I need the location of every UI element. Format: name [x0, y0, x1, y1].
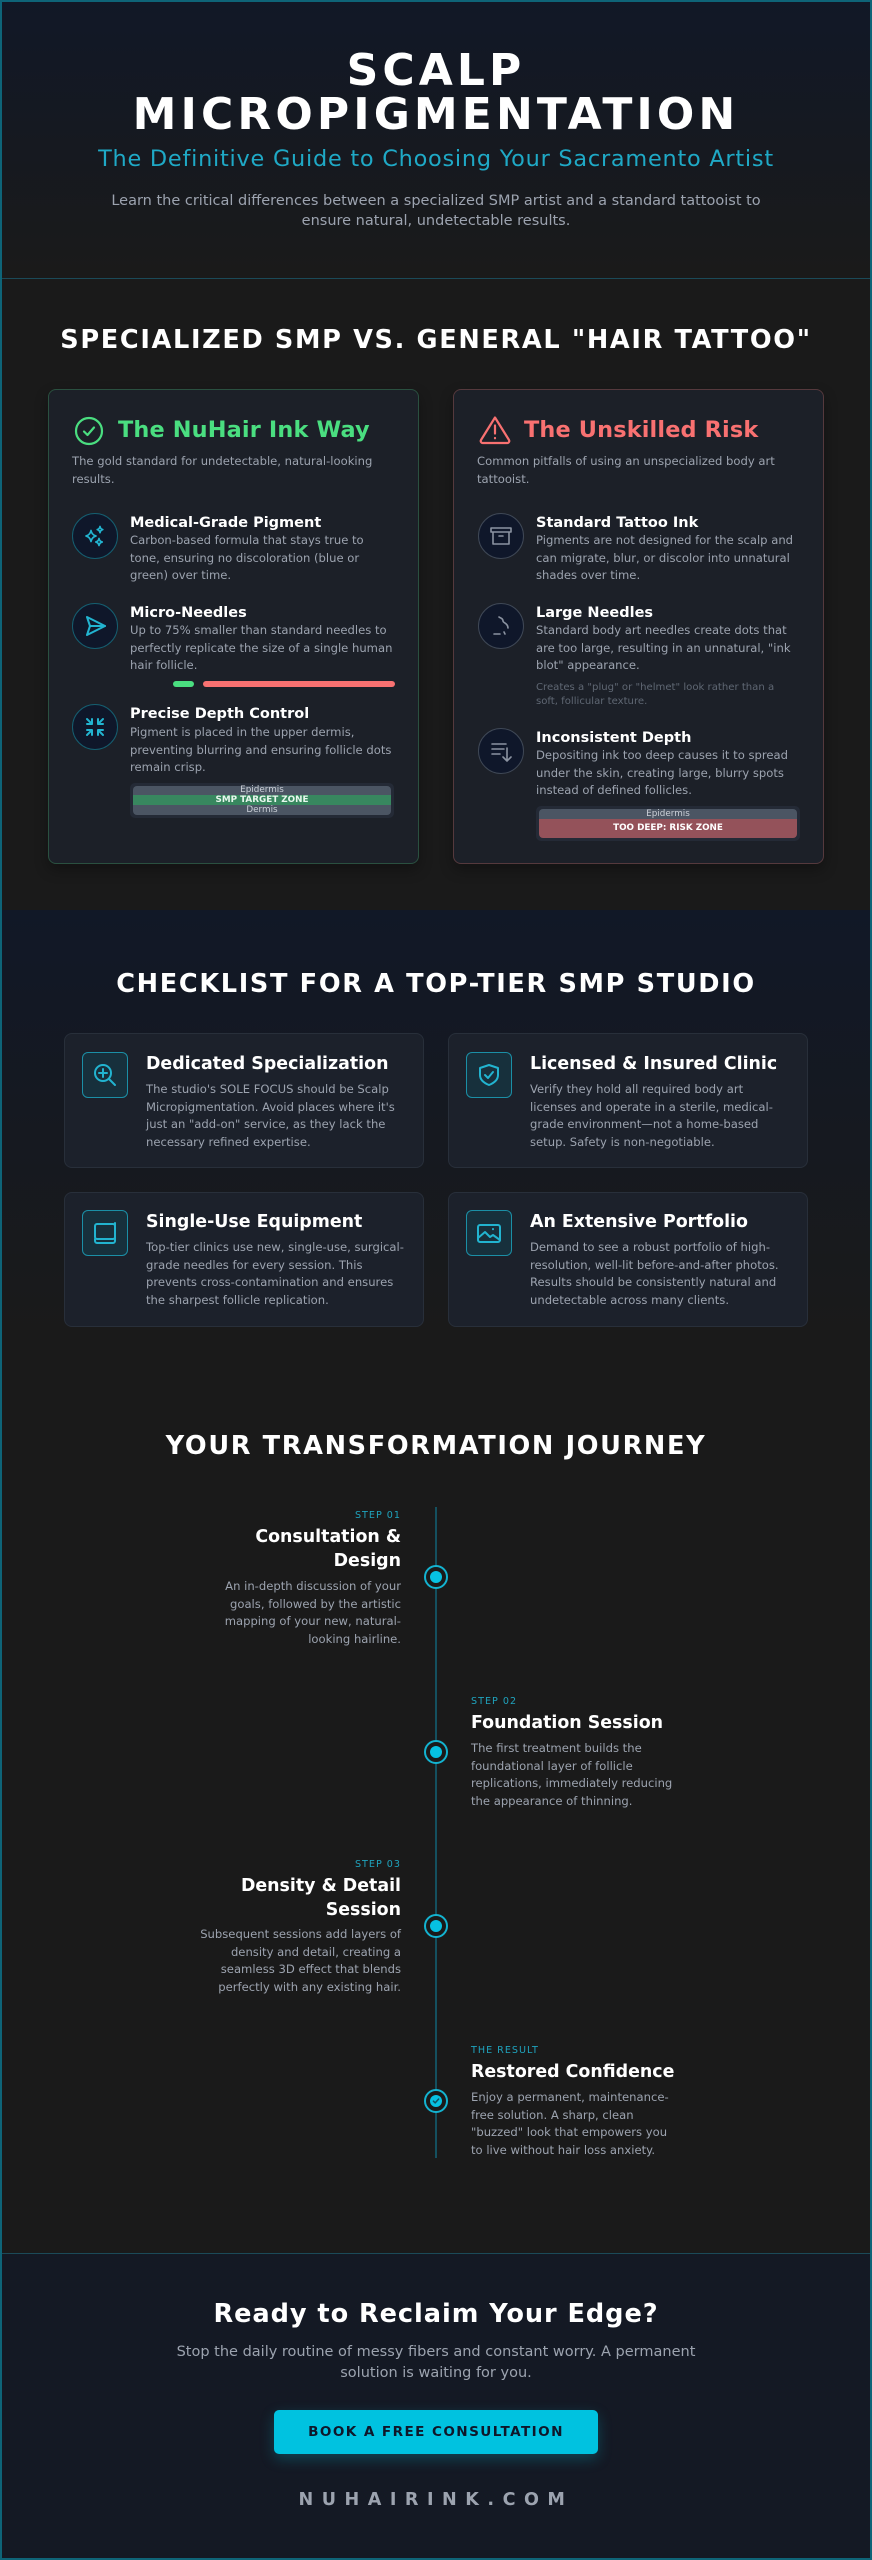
step 02 description: The first treatment builds the: [471, 1741, 642, 1755]
text: tattoo ink description: Pigments are not designed for the scalp and: [536, 533, 793, 547]
note: plug or helmet look: Creates a "plug" or "helmet" look rather than a: [536, 682, 774, 692]
text: medical-grade description: green) over time.: [130, 568, 231, 582]
text: tattoo ink description: [536, 533, 793, 582]
item: standard tattoo ink: Standard Tattoo Ink: [536, 515, 698, 531]
step 03 title: Density & Detail: [241, 1876, 401, 1896]
skin depth diagram: target zone: SMP TARGET ZONE: [215, 795, 309, 805]
item: inconsistent depth: Inconsistent Depth: [536, 730, 691, 746]
step 02 description: foundational layer of follicle: [471, 1758, 633, 1772]
step 02 description: replications, immediately reducing: [471, 1776, 672, 1790]
text: dedicated specialization description: The studio's SOLE FOCUS should be Scalp: [146, 1082, 389, 1096]
step 01 title: [255, 1527, 401, 1571]
text: depth control description: preventing blurring and ensuring follicle dots: [130, 742, 391, 756]
panel: the unskilled risk: [453, 389, 824, 864]
text: micro-needles description: Up to 75% smaller than standard needles to: [130, 623, 387, 637]
text: dedicated specialization description: [146, 1082, 395, 1148]
header band: [0, 0, 872, 279]
text: depth control description: [130, 725, 391, 774]
note: plug or helmet look: [536, 682, 774, 707]
intro text: ensure natural, undetectable results.: [302, 213, 570, 229]
icon: paper plane: [72, 603, 118, 649]
text: single-use description: Top-tier clinics use new, single-use, surgical-: [146, 1240, 404, 1254]
text: micro-needles description: perfectly replicate the size of a single human: [130, 640, 392, 654]
skin depth diagram: risk zone: [536, 806, 800, 841]
text: dedicated specialization description: just an "add-on" service, as they lack the: [146, 1117, 385, 1131]
step 02 description: [470, 1741, 672, 1808]
text: licensed and insured description: licenses and operate in a sterile, medical-: [530, 1100, 773, 1114]
step 02 description: the appearance of thinning.: [471, 1794, 632, 1808]
title: single-use equipment: Single-Use Equipment: [146, 1212, 362, 1232]
icon: warning triangle: [480, 416, 510, 444]
step 01 description: goals, followed by the artistic: [230, 1596, 401, 1610]
step 01 description: [225, 1579, 401, 1646]
CTA heading: Ready to Reclaim Your Edge?: [213, 2299, 659, 2329]
text: licensed and insured description: setup. Safety is non-negotiable.: [530, 1134, 715, 1148]
text: tattoo ink description: can migrate, blur, or discolor into unnatural: [536, 550, 790, 564]
panel: single-use equipment: [64, 1192, 424, 1327]
main title: [133, 45, 739, 140]
comparison heading: SPECIALIZED SMP VS. GENERAL "HAIR TATTOO": [60, 325, 812, 355]
result description: free solution. A sharp, clean: [471, 2108, 634, 2122]
icon: broken needle: [478, 603, 524, 649]
text: common pitfalls: Common pitfalls of using an unspecialized body art: [477, 454, 775, 468]
text: common pitfalls: [477, 454, 775, 486]
step 03 description: [200, 1927, 402, 1994]
CTA button: BOOK A FREE CONSULTATION: [308, 2424, 564, 2440]
title: dedicated specialization: Dedicated Specialization: [146, 1054, 388, 1074]
skin depth diagram: risk zone: Epidermis: [646, 809, 690, 819]
subtitle: The Definitive Guide to Choosing Your Sacramento Artist: [98, 146, 774, 172]
text: micro-needles description: [130, 623, 392, 672]
CTA text: solution is waiting for you.: [340, 2364, 532, 2380]
text: portfolio description: resolution, well-lit before-and-after photos.: [530, 1258, 779, 1272]
checklist band: [0, 910, 872, 1340]
intro text: [111, 192, 761, 229]
text: portfolio description: Demand to see a robust portfolio of high-: [530, 1240, 770, 1254]
intro text: Learn the critical differences between a specialized SMP artist and a standard tattooist to: [111, 192, 761, 208]
timeline marker 1: [424, 1565, 448, 1589]
text: dedicated specialization description: Micropigmentation. Avoid places where it's: [146, 1100, 395, 1114]
icon: image: [466, 1210, 512, 1256]
heading: NuHair way: The NuHair Ink Way: [118, 417, 370, 443]
text: medical-grade description: tone, ensuring no discoloration (blue or: [130, 550, 359, 564]
CTA text: [177, 2344, 696, 2380]
timeline marker 4: check: [424, 2089, 448, 2113]
text: single-use description: the sharpest follicle replication.: [146, 1292, 329, 1306]
CTA text: Stop the daily routine of messy fibers and constant worry. A permanent: [177, 2344, 695, 2360]
main title: SCALP: [347, 45, 525, 96]
text: licensed and insured description: [530, 1082, 773, 1148]
timeline marker 3: [424, 1914, 448, 1938]
skin depth diagram: target zone: Dermis: [246, 805, 278, 815]
item: large needles: Large Needles: [536, 605, 653, 621]
text: large needles description: are too large, resulting in an unnatural, "ink: [536, 640, 791, 654]
text: single-use description: prevents cross-contamination and ensures: [146, 1275, 393, 1289]
icon: shield check: [466, 1052, 512, 1098]
text: portfolio description: [530, 1240, 779, 1306]
journey heading: YOUR TRANSFORMATION JOURNEY: [166, 1431, 706, 1461]
result description: [471, 2090, 669, 2156]
icon: layered tray: [82, 1210, 128, 1256]
needle size comparison bars: [173, 681, 395, 687]
text: inconsistent depth description: Depositing ink too deep causes it to spread: [536, 748, 788, 762]
text: tattoo ink description: shades over time.: [536, 568, 640, 582]
timeline line: [435, 1507, 437, 2158]
text: inconsistent depth description: [536, 748, 788, 797]
step 01 description: mapping of your new, natural-: [225, 1614, 401, 1628]
icon: archive box: [478, 513, 524, 559]
heading: unskilled risk: The Unskilled Risk: [524, 417, 758, 443]
text: large needles description: blot" appearance.: [536, 658, 640, 672]
note: plug or helmet look: soft, follicular texture.: [536, 696, 647, 707]
text: large needles description: [536, 623, 791, 672]
timeline marker 2: [424, 1740, 448, 1764]
text: single-use description: [146, 1240, 404, 1306]
step 03 description: seamless 3D effect that blends: [221, 1962, 401, 1976]
text: inconsistent depth description: under the skin, creating large, blurry spots: [536, 766, 784, 780]
step 03 title: Session: [326, 1900, 401, 1920]
text: micro-needles description: hair follicle.: [130, 658, 197, 672]
icon: check circle: [74, 416, 104, 446]
text: medical-grade description: Carbon-based formula that stays true to: [130, 533, 364, 547]
text: licensed and insured description: grade environment—not a home-based: [530, 1117, 758, 1131]
step 03 title: [241, 1876, 401, 1920]
panel: the NuHair Ink way: [48, 389, 418, 864]
CTA button: [274, 2410, 598, 2454]
text: medical-grade description: [130, 533, 364, 582]
title: licensed and insured: Licensed & Insured Clinic: [530, 1054, 777, 1074]
text: common pitfalls: tattooist.: [477, 472, 529, 486]
website: NUHAIRINK.COM: [299, 2490, 573, 2510]
skin depth diagram: target zone: Epidermis: [240, 785, 284, 795]
text: single-use description: grade needles for every session. This: [146, 1258, 363, 1272]
text: large needles description: Standard body art needles create dots that: [536, 623, 787, 637]
skin depth diagram: target zone: [130, 783, 394, 818]
text: dedicated specialization description: necessary refined expertise.: [146, 1134, 311, 1148]
text: portfolio description: Results should be consistently natural and: [530, 1275, 776, 1289]
result description: "buzzed" look that empowers you: [471, 2125, 667, 2139]
result label: THE RESULT: [471, 2045, 539, 2056]
item: micro-needles: Micro-Needles: [130, 605, 247, 621]
text: depth control description: Pigment is placed in the upper dermis,: [130, 725, 354, 739]
step 03 label: STEP 03: [355, 1859, 401, 1870]
result description: to live without hair loss anxiety.: [471, 2142, 655, 2156]
title: extensive portfolio: An Extensive Portfolio: [530, 1212, 748, 1232]
icon: sort down: [478, 728, 524, 774]
icon: compress arrows: [72, 704, 118, 750]
skin depth diagram: risk zone: TOO DEEP: RISK ZONE: [613, 823, 723, 833]
result description: Enjoy a permanent, maintenance-: [471, 2090, 669, 2104]
step 02 title: Foundation Session: [471, 1713, 663, 1733]
text: gold standard: [72, 454, 372, 486]
panel: licensed and insured: [448, 1033, 808, 1168]
text: licensed and insured description: Verify they hold all required body art: [530, 1082, 743, 1096]
step 01 label: STEP 01: [355, 1510, 401, 1521]
result title: Restored Confidence: [471, 2062, 674, 2082]
icon: sparkles: [72, 513, 118, 559]
step 03 description: Subsequent sessions add layers of: [200, 1927, 401, 1941]
text: gold standard: results.: [72, 472, 115, 486]
panel: dedicated specialization: [64, 1033, 424, 1168]
item: medical-grade pigment: Medical-Grade Pigment: [130, 515, 321, 531]
main title: MICROPIGMENTATION: [133, 89, 739, 140]
text: portfolio description: undetectable across many clients.: [530, 1292, 729, 1306]
text: depth control description: remain crisp.: [130, 760, 206, 774]
step 03 description: perfectly with any existing hair.: [218, 1980, 401, 1994]
text: inconsistent depth description: instead of defined follicles.: [536, 783, 692, 797]
step 03 description: density and detail, creating a: [231, 1944, 401, 1958]
step 01 description: An in-depth discussion of your: [225, 1579, 401, 1593]
step 02 label: STEP 02: [471, 1696, 517, 1707]
item: precise depth control: Precise Depth Control: [130, 706, 309, 722]
step 01 title: Consultation &: [255, 1527, 401, 1547]
icon: zoom: [82, 1052, 128, 1098]
text: gold standard: The gold standard for undetectable, natural-looking: [72, 454, 372, 468]
step 01 title: Design: [334, 1551, 401, 1571]
call to action band: [0, 2253, 872, 2560]
checklist heading: CHECKLIST FOR A TOP-TIER SMP STUDIO: [116, 969, 756, 999]
step 01 description: looking hairline.: [308, 1632, 401, 1646]
panel: extensive portfolio: [448, 1192, 808, 1327]
